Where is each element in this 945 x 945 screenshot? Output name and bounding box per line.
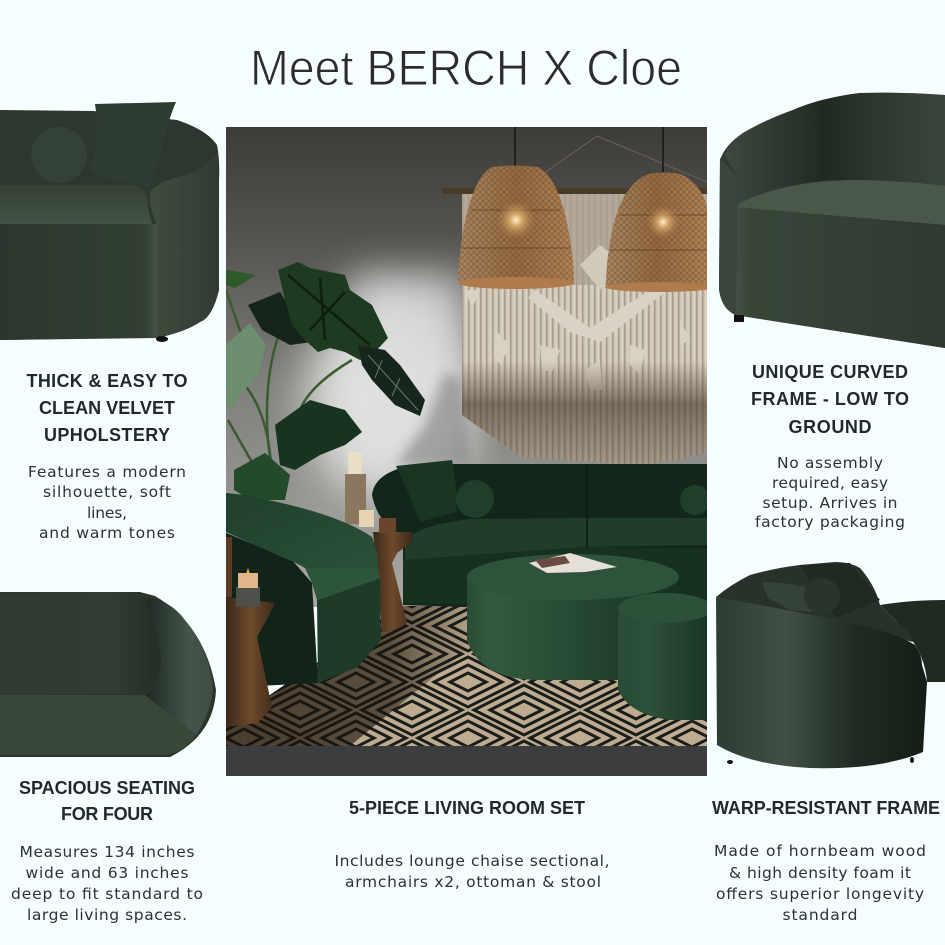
heading: GROUND: [788, 417, 872, 437]
body text: [334, 852, 610, 891]
body text: and warm tones: [39, 524, 175, 542]
heading: [26, 371, 188, 445]
side table, front with candle: [226, 537, 275, 727]
heading: 5-PIECE LIVING ROOM SET: [349, 798, 585, 818]
stool: [618, 593, 712, 720]
body text: large living spaces.: [27, 906, 187, 924]
body text: required, easy: [772, 474, 888, 492]
heading: THICK & EASY TO: [26, 371, 188, 391]
monstera plant: [226, 262, 425, 500]
heading: SPACIOUS SEATING: [19, 778, 195, 798]
body text: Made of hornbeam wood: [714, 842, 926, 860]
heading: [751, 362, 909, 437]
candles on pillar: [345, 452, 396, 533]
sofa pillows: [396, 460, 710, 522]
pendant lamps: [458, 127, 715, 292]
body text: No assembly: [777, 454, 883, 472]
heading: WARP-RESISTANT FRAME: [712, 798, 940, 818]
body text: standard: [782, 906, 858, 924]
icon: round bolster pillow: [31, 127, 87, 183]
photo: central living room scene: [226, 127, 715, 776]
body text: [755, 454, 905, 531]
body text: [714, 842, 926, 924]
heading: UPHOLSTERY: [44, 425, 170, 445]
text: warp-resistant frame: [712, 798, 940, 924]
wall plant shadow: [395, 372, 470, 468]
text: curved frame: [751, 362, 909, 531]
text: living room set: [334, 798, 610, 891]
body text: [28, 463, 186, 542]
body text: & high density foam it: [729, 864, 911, 882]
heading: FRAME - LOW TO: [751, 389, 909, 409]
macrame wall hanging: [442, 136, 707, 465]
body text: [11, 843, 203, 924]
heading: UNIQUE CURVED: [752, 362, 908, 382]
armchair: [226, 493, 381, 686]
body text: armchairs x2, ottoman & stool: [345, 873, 601, 891]
body text: Features a modern: [28, 463, 186, 481]
photo: sofa rear view, bottom right: [716, 562, 945, 768]
open book: [529, 553, 617, 573]
body text: setup. Arrives in: [762, 494, 898, 512]
body text: Includes lounge chaise sectional,: [334, 852, 610, 870]
photo: sofa front view, top left: [0, 102, 219, 342]
title: Meet BERCH X Cloe: [250, 40, 682, 96]
body text: offers superior longevity: [716, 885, 924, 903]
photo: sofa top view, bottom left: [0, 592, 216, 757]
heading: CLEAN VELVET: [39, 398, 175, 418]
text: spacious seating: [11, 778, 203, 924]
photo: sofa arm view, top right: [719, 93, 945, 348]
wall: [226, 127, 707, 607]
icon: square throw pillow: [90, 102, 176, 188]
floor: [226, 745, 707, 776]
body text: wide and 63 inches: [26, 864, 188, 882]
body text: Measures 134 inches: [20, 843, 194, 861]
sofa sectional: [372, 460, 710, 615]
body text: silhouette, soft: [43, 483, 171, 501]
heading: [19, 778, 195, 824]
text: velvet upholstery: [26, 371, 188, 542]
heading: FOR FOUR: [61, 804, 153, 824]
rug: [226, 606, 707, 746]
body text: factory packaging: [755, 513, 905, 531]
side table, back: [373, 532, 412, 632]
body text: deep to fit standard to: [11, 885, 203, 903]
body text: lines,: [87, 504, 127, 522]
ottoman: [467, 553, 680, 680]
